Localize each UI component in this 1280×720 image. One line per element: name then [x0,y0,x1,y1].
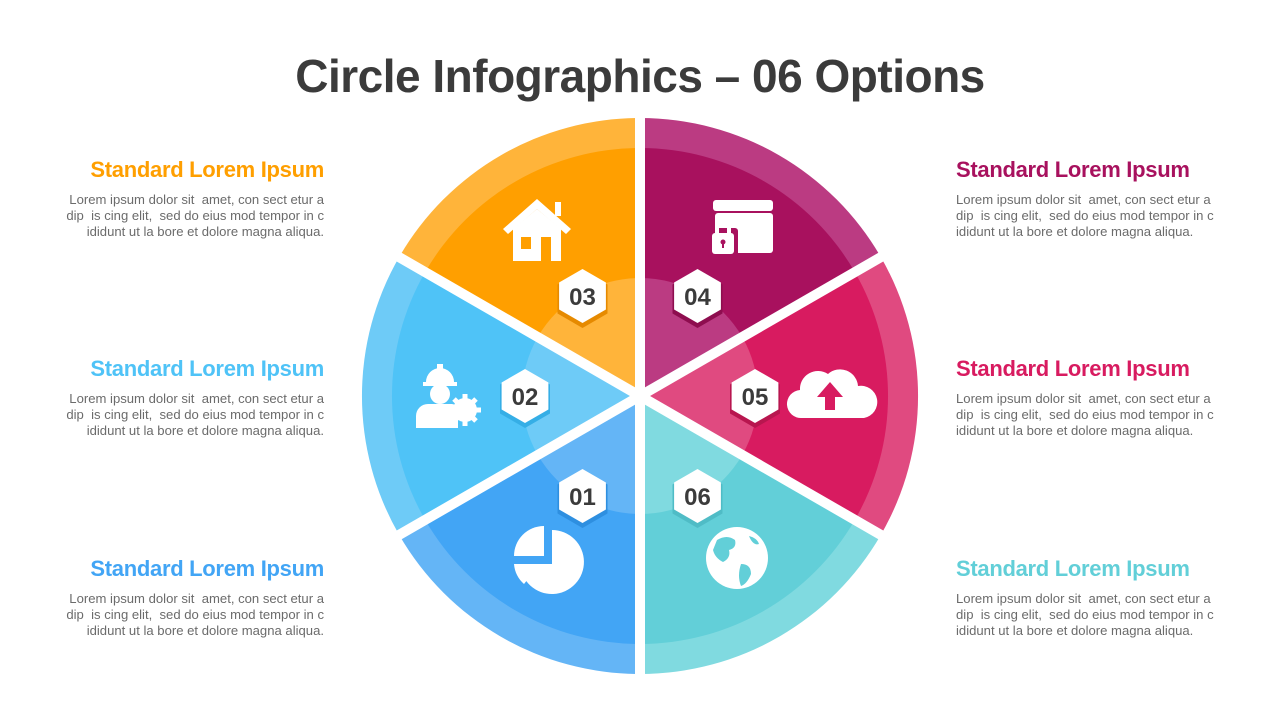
sector 06 [640,396,881,674]
text block 05: Lorem ipsum dolor sit amet, con sect etur a dip is cing elit, sed do eius mod tempor in c ididunt ut la bore et dolore magna aliqua. [956,391,1214,438]
text block 06 [956,556,1214,638]
text block 04: Lorem ipsum dolor sit amet, con sect etur a dip is cing elit, sed do eius mod tempor in c ididunt ut la bore et dolore magna aliqua. [956,192,1214,239]
text block 02: Standard Lorem Ipsum [90,356,324,381]
sector 04 [640,118,881,396]
text block 03: Standard Lorem Ipsum [90,157,324,182]
hexagon 01: 01 [569,484,596,511]
text block 06: Standard Lorem Ipsum [956,556,1190,581]
icon: locked box [708,200,773,258]
text block 06: Lorem ipsum dolor sit amet, con sect etur a dip is cing elit, sed do eius mod tempor in c ididunt ut la bore et dolore magna aliqua. [956,591,1214,638]
icon: cloud upload [787,369,877,418]
text block 01: Lorem ipsum dolor sit amet, con sect etur a dip is cing elit, sed do eius mod tempor in c ididunt ut la bore et dolore magna aliqua. [66,591,324,638]
sector 05 [640,257,918,535]
sector 02 [362,257,640,535]
hexagon 05: 05 [742,384,768,411]
hexagon 05 [730,369,780,428]
icon: globe [706,527,768,589]
text block 02: Lorem ipsum dolor sit amet, con sect etur a dip is cing elit, sed do eius mod tempor in c ididunt ut la bore et dolore magna aliqua. [66,391,324,438]
text block 03: Lorem ipsum dolor sit amet, con sect etur a dip is cing elit, sed do eius mod tempor in c ididunt ut la bore et dolore magna aliqua. [66,192,324,239]
icon: pie chart [514,526,584,594]
text block 05 [956,356,1214,438]
hexagon 06: 06 [684,484,711,511]
hexagon 04: 04 [684,284,711,311]
hexagon 04 [672,269,722,328]
text block 01 [66,556,324,638]
hexagon 03: 03 [569,284,596,311]
hexagon 01 [558,469,608,528]
hexagon 06 [672,469,722,528]
title: Circle Infographics – 06 Options [295,50,985,102]
text block 01: Standard Lorem Ipsum [90,556,324,581]
text block 05: Standard Lorem Ipsum [956,356,1190,381]
hexagon 02: 02 [512,384,538,411]
sector 03 [399,118,640,396]
sector 01 [399,396,640,674]
text block 03 [66,157,324,239]
text block 02 [66,356,324,438]
icon: worker with gear [416,364,481,428]
text block 04: Standard Lorem Ipsum [956,157,1190,182]
hexagon 03 [558,269,608,328]
icon: house [503,199,571,261]
hexagon 02 [500,369,550,428]
text block 04 [956,157,1214,239]
